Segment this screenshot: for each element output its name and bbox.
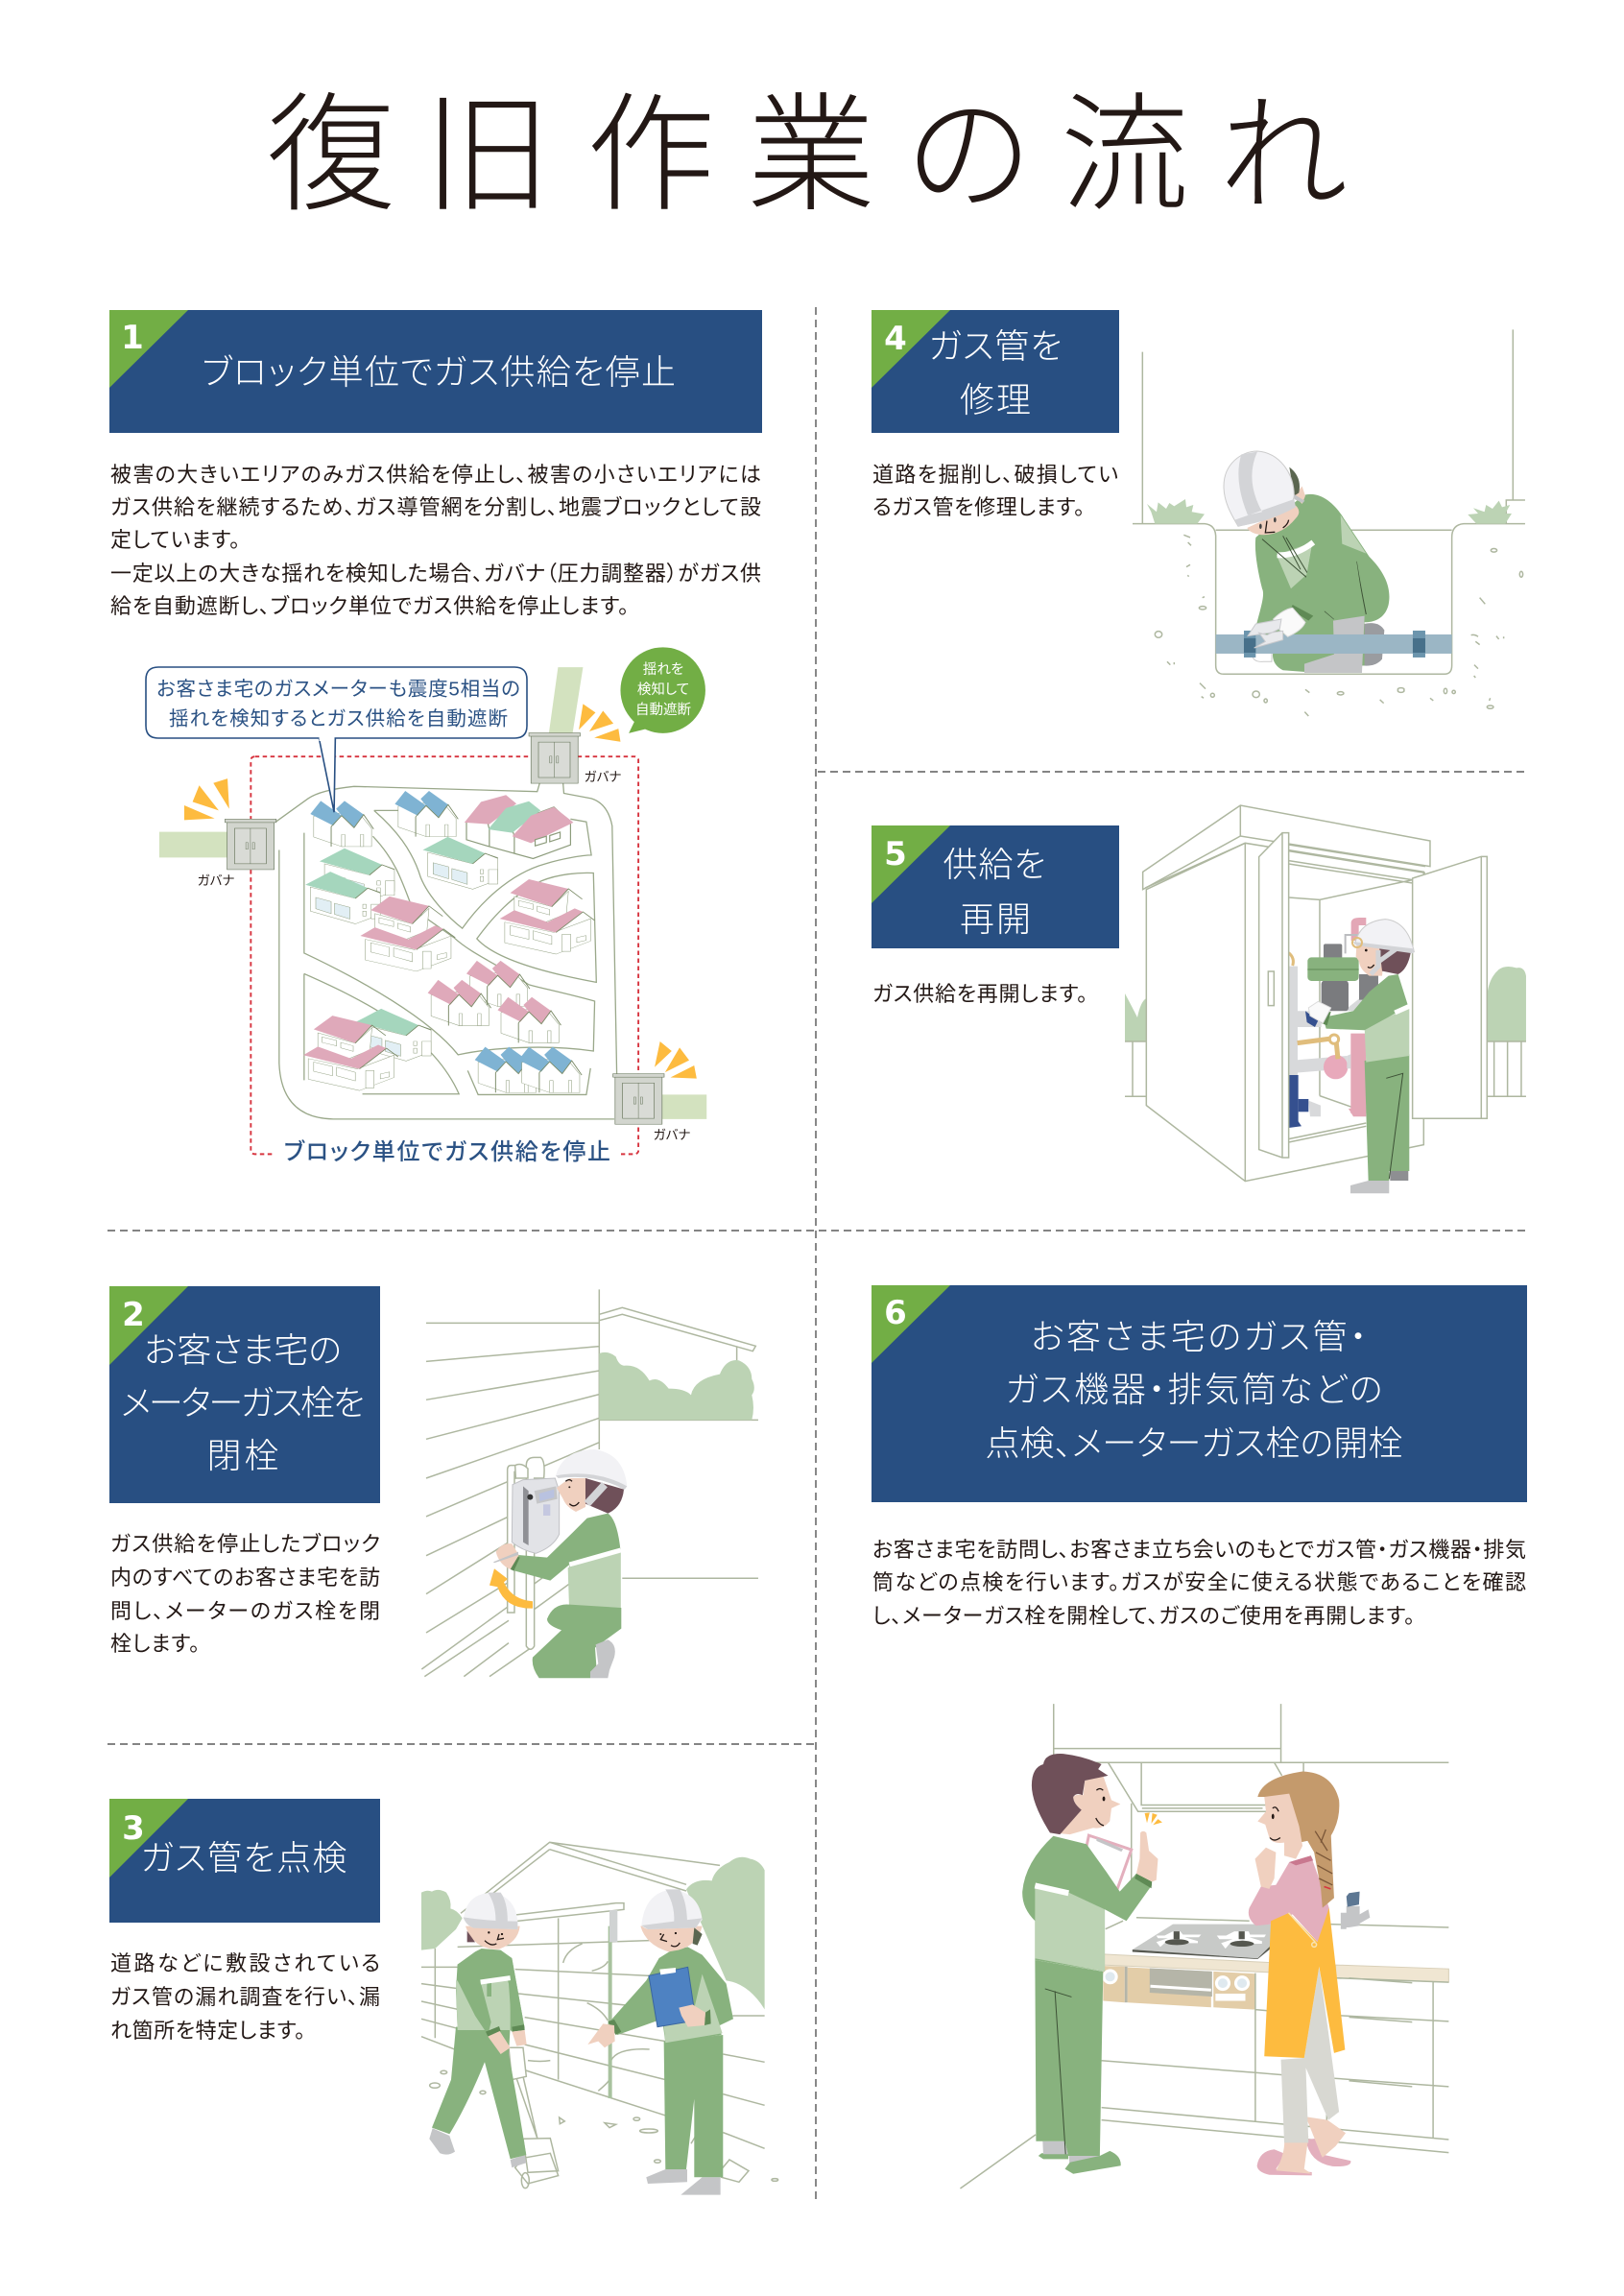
text block: step 1 description: 定しています。 [110,528,240,552]
text block: step 4 description: 道路を掘削し、破損してい [872,463,1118,487]
heading: step 2: お客さま宅の [144,1330,342,1370]
heading: step 2: メーターガス栓を [121,1383,365,1423]
title: 流 [1061,84,1189,227]
illustration: worker closing meter valve [421,1289,758,1678]
callout: meter detection: お客さま宅のガスメーターも震度5相当の [156,678,520,701]
heading: step 3 [109,1799,380,1923]
title: の [906,84,1031,227]
heading: step 6: 点検、メーターガス栓の開栓 [985,1423,1403,1463]
text block: step 6 description [872,1538,1526,1628]
title: 業 [747,84,875,227]
badge: automatic shutoff: 揺れを [643,661,683,678]
heading: step 1 [109,310,762,433]
panel: step 6 [872,1285,1527,2188]
title [267,84,1347,227]
heading: step 4: 4 [884,320,907,358]
labels: governors: ガバナ [198,873,234,888]
text block: step 2 description [110,1532,380,1656]
title: 作 [586,84,715,227]
heading: step 4: ガス管を [929,326,1062,366]
text block: step 4 description [872,463,1118,519]
text block: step 1 description: ガス供給を継続するため、ガス導管網を分割し、地震ブロックとして設 [110,495,761,519]
text block: step 3 description: ガス管の漏れ調査を行い、漏 [110,1985,380,2009]
label: block shutoff: ブロック単位でガス供給を停止 [284,1138,610,1165]
text block: step 2 description: 問し、メーターのガス栓を閉 [110,1599,380,1623]
heading: step 6 [872,1285,1527,1502]
text block: step 6 description: お客さま宅を訪問し、お客さま立ち会いのもとでガス管・ガス機器・排気 [872,1538,1526,1562]
heading: step 2 [109,1286,380,1503]
callout: meter detection [146,667,527,741]
text block: step 1 description: 一定以上の大きな揺れを検知した場合、ガバナ（圧力調整器）がガス供 [110,562,761,586]
title: 旧 [423,84,552,227]
title: 復 [267,84,395,227]
heading: step 1: 1 [121,319,144,357]
title: れ [1218,84,1347,227]
heading: step 3: 3 [122,1809,145,1848]
text block: step 5 description: ガス供給を再開します。 [872,982,1087,1006]
labels: governors [198,770,691,1142]
heading: step 2: 2 [122,1296,145,1334]
text block: step 6 description: し、メーターガス栓を開栓して、ガスのご使用を再開します。 [872,1604,1415,1628]
heading: step 5: 5 [884,835,907,873]
panel: step 5 [872,805,1526,1193]
panel: step 3 [109,1799,778,2195]
text block: step 1 description [110,463,761,618]
badge: automatic shutoff [635,661,691,718]
labels: governors: ガバナ [653,1128,691,1142]
heading: step 3: ガス管を点検 [140,1838,347,1877]
text block: step 2 description: 栓します。 [110,1632,200,1656]
illustration: leak survey workers [421,1842,778,2195]
text block: step 1 description: 被害の大きいエリアのみガス供給を停止し、被害の小さいエリアには [110,463,761,487]
panel: step 2 [109,1286,758,1678]
illustration: kitchen inspection with resident [960,1704,1448,2188]
text block: step 3 description: 道路などに敷設されている [110,1951,380,1975]
illustration: reopening governor cabinet [1125,805,1526,1193]
text block: step 4 description: るガス管を修理します。 [872,495,1085,519]
illustration: pipe repair in trench [1133,329,1525,716]
heading: step 5: 供給を [943,845,1046,884]
badge: automatic shutoff: 自動遮断 [635,702,691,718]
text block: step 3 description: れ箇所を特定します。 [110,2019,305,2043]
heading: step 6: 6 [884,1294,907,1332]
callout: meter detection: 揺れを検知するとガス供給を自動遮断 [169,708,508,729]
badge: automatic shutoff: 検知して [637,682,689,698]
text block: step 2 description: ガス供給を停止したブロック [110,1532,380,1556]
heading: step 5: 再開 [960,899,1031,939]
heading: step 2: 閉栓 [207,1436,278,1475]
text block: step 2 description: 内のすべてのお客さま宅を訪 [110,1566,380,1590]
heading: step 6: ガス機器・排気筒などの [1006,1370,1382,1409]
text block: step 1 description: 給を自動遮断し、ブロック単位でガス供給を停止します。 [110,594,629,618]
heading: step 6: お客さま宅のガス管・ [1031,1317,1367,1356]
text block: step 3 description [110,1951,380,2043]
heading: step 4 [872,310,1119,433]
heading: step 4: 修理 [960,380,1031,419]
panel: step 4 [872,310,1525,716]
panel: step 1 [109,310,762,1167]
map: gas block with governors [146,647,706,1167]
heading: step 5 [872,825,1119,948]
labels: governors: ガバナ [584,770,622,784]
text block: step 6 description: 筒などの点検を行います。ガスが安全に使える状態であることを確認 [872,1570,1526,1594]
heading: step 1: ブロック単位でガス供給を停止 [202,352,676,392]
